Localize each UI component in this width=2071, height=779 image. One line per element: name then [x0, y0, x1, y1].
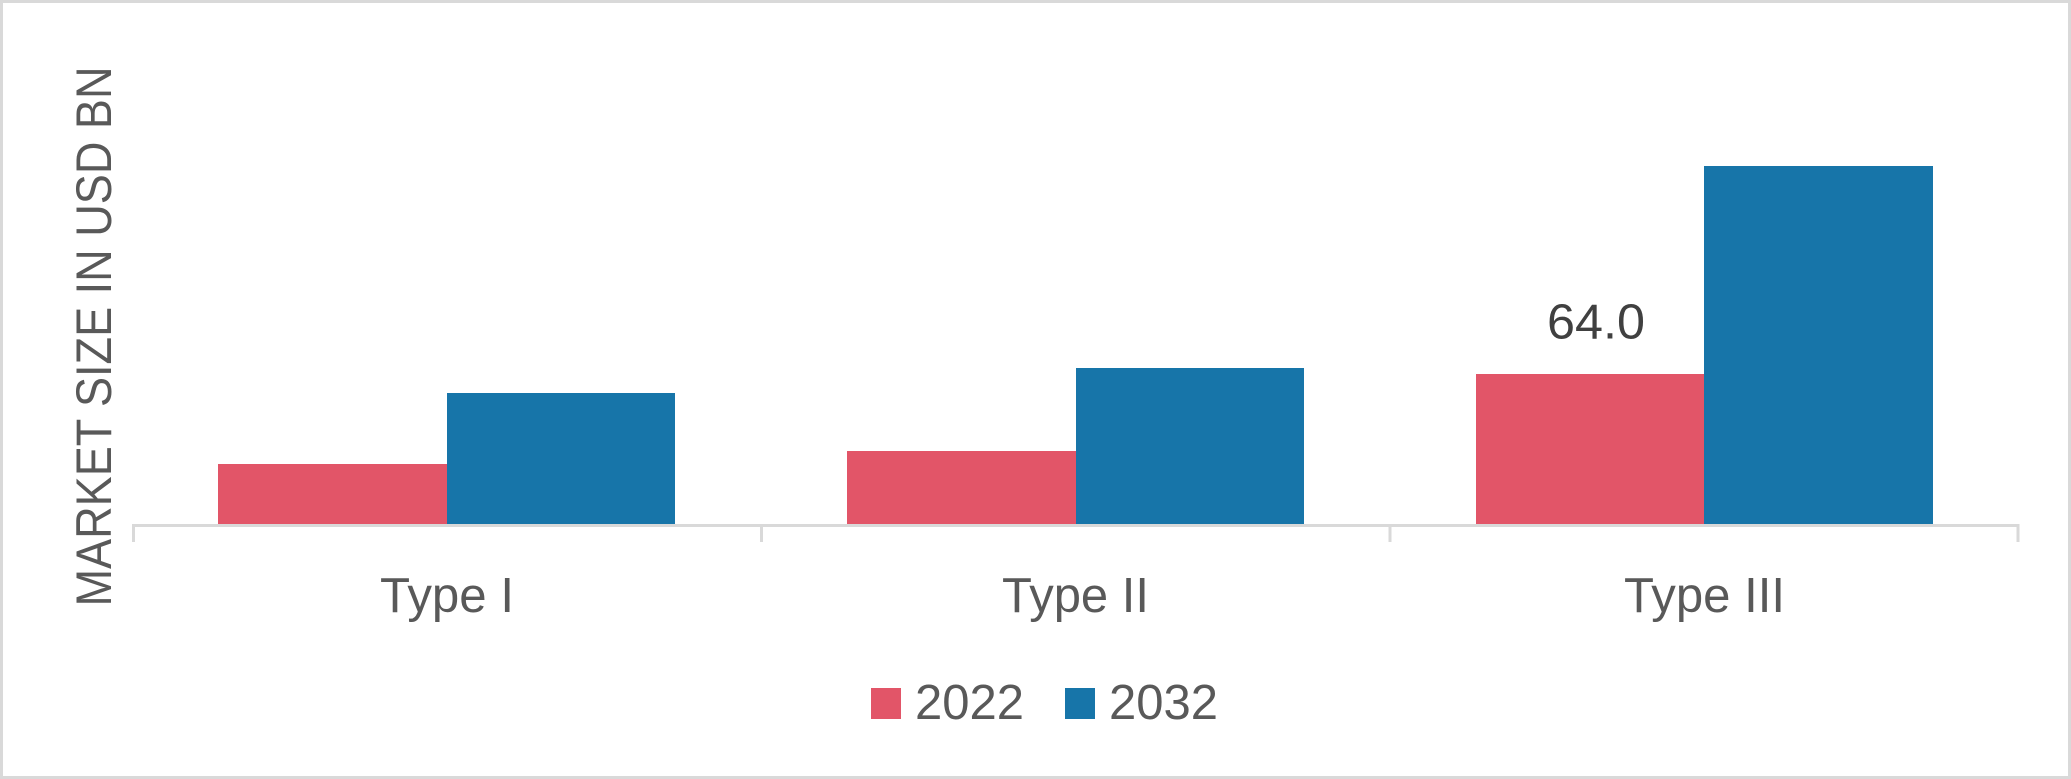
- bar: Type III 2032: [1704, 166, 1933, 524]
- data label: 64.0: 64.0: [1547, 296, 1645, 350]
- bar: Type I 2032: [447, 393, 675, 524]
- legend swatch: 2022: [871, 688, 901, 719]
- legend label: 2022: 2022: [915, 676, 1024, 730]
- category label: Type II: Type II: [1002, 569, 1149, 623]
- x axis with ticks: [134, 526, 2018, 542]
- category label: Type I: Type I: [380, 569, 514, 623]
- bar group: Type III: [1476, 166, 1933, 524]
- bar: Type II 2032: [1076, 368, 1304, 524]
- y-axis title: MARKET SIZE IN USD BN: [66, 66, 122, 606]
- bar: Type II 2022: [847, 451, 1076, 524]
- legend swatch: 2032: [1065, 688, 1095, 719]
- bar: Type I 2022: [218, 464, 447, 524]
- legend label: 2032: 2032: [1109, 676, 1218, 730]
- category label: Type III: Type III: [1624, 569, 1785, 623]
- bar: Type III 2022: [1476, 374, 1704, 524]
- bar group: Type II: [847, 368, 1304, 524]
- bar group: Type I: [218, 393, 675, 524]
- legend: [871, 676, 1218, 730]
